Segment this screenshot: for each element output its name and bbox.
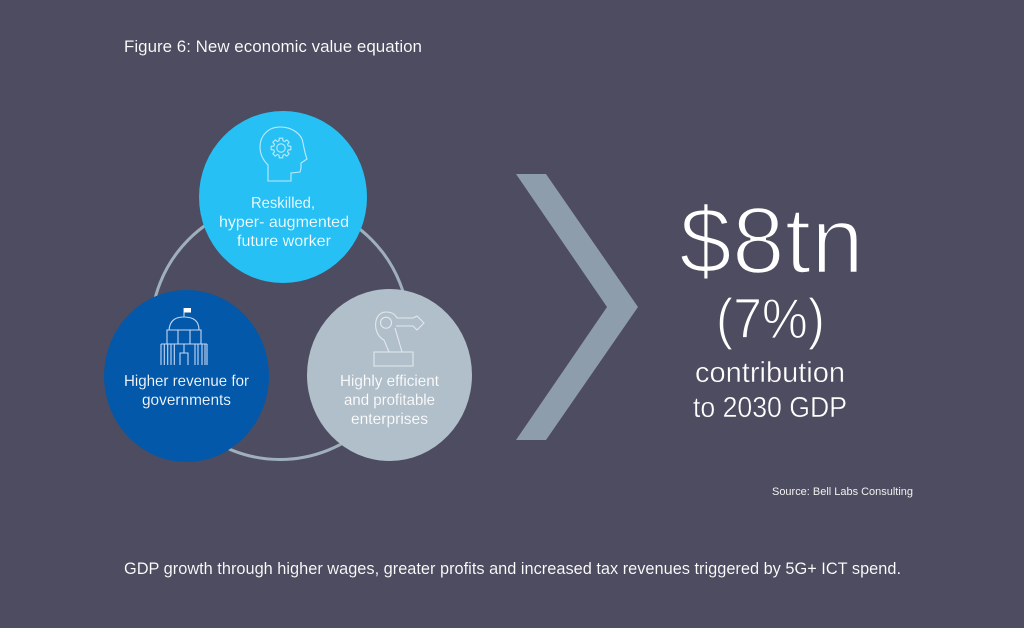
icon: capitol building [161,308,207,365]
headline figure: $8tn [679,188,864,294]
arrow: chevron [516,174,638,440]
headline figure [679,188,864,424]
source: Source: Bell Labs Consulting [772,486,913,498]
contribution text [693,357,847,424]
text: governments: Higher revenue for [124,373,250,390]
text: enterprises: and profitable [344,392,435,409]
panel: reskilled worker [199,111,367,283]
panel: governments [104,290,269,462]
text: governments: governments [142,392,231,409]
text: enterprises: Highly efficient [340,373,440,390]
text: governments [124,373,250,409]
footer statement: GDP growth through higher wages, greater profits and increased tax revenues triggered by 5G+ ICT spend. [124,560,901,578]
contribution text: contribution [695,357,845,389]
text: enterprises: enterprises [351,411,428,428]
icon: robot arm [374,312,424,366]
connecting ring [151,202,409,460]
contribution text: to 2030 GDP [693,392,847,424]
percentage: (7%) [716,287,825,351]
text: reskilled worker: Reskilled, [251,195,315,212]
figure title: Figure 6: New economic value equation [124,38,422,56]
icon: head with gear [260,127,307,181]
text: reskilled worker: hyper- augmented [219,214,349,231]
text: reskilled worker [219,195,349,250]
panel: enterprises [307,289,472,461]
text: reskilled worker: future worker [237,233,332,250]
text: enterprises [340,373,440,428]
